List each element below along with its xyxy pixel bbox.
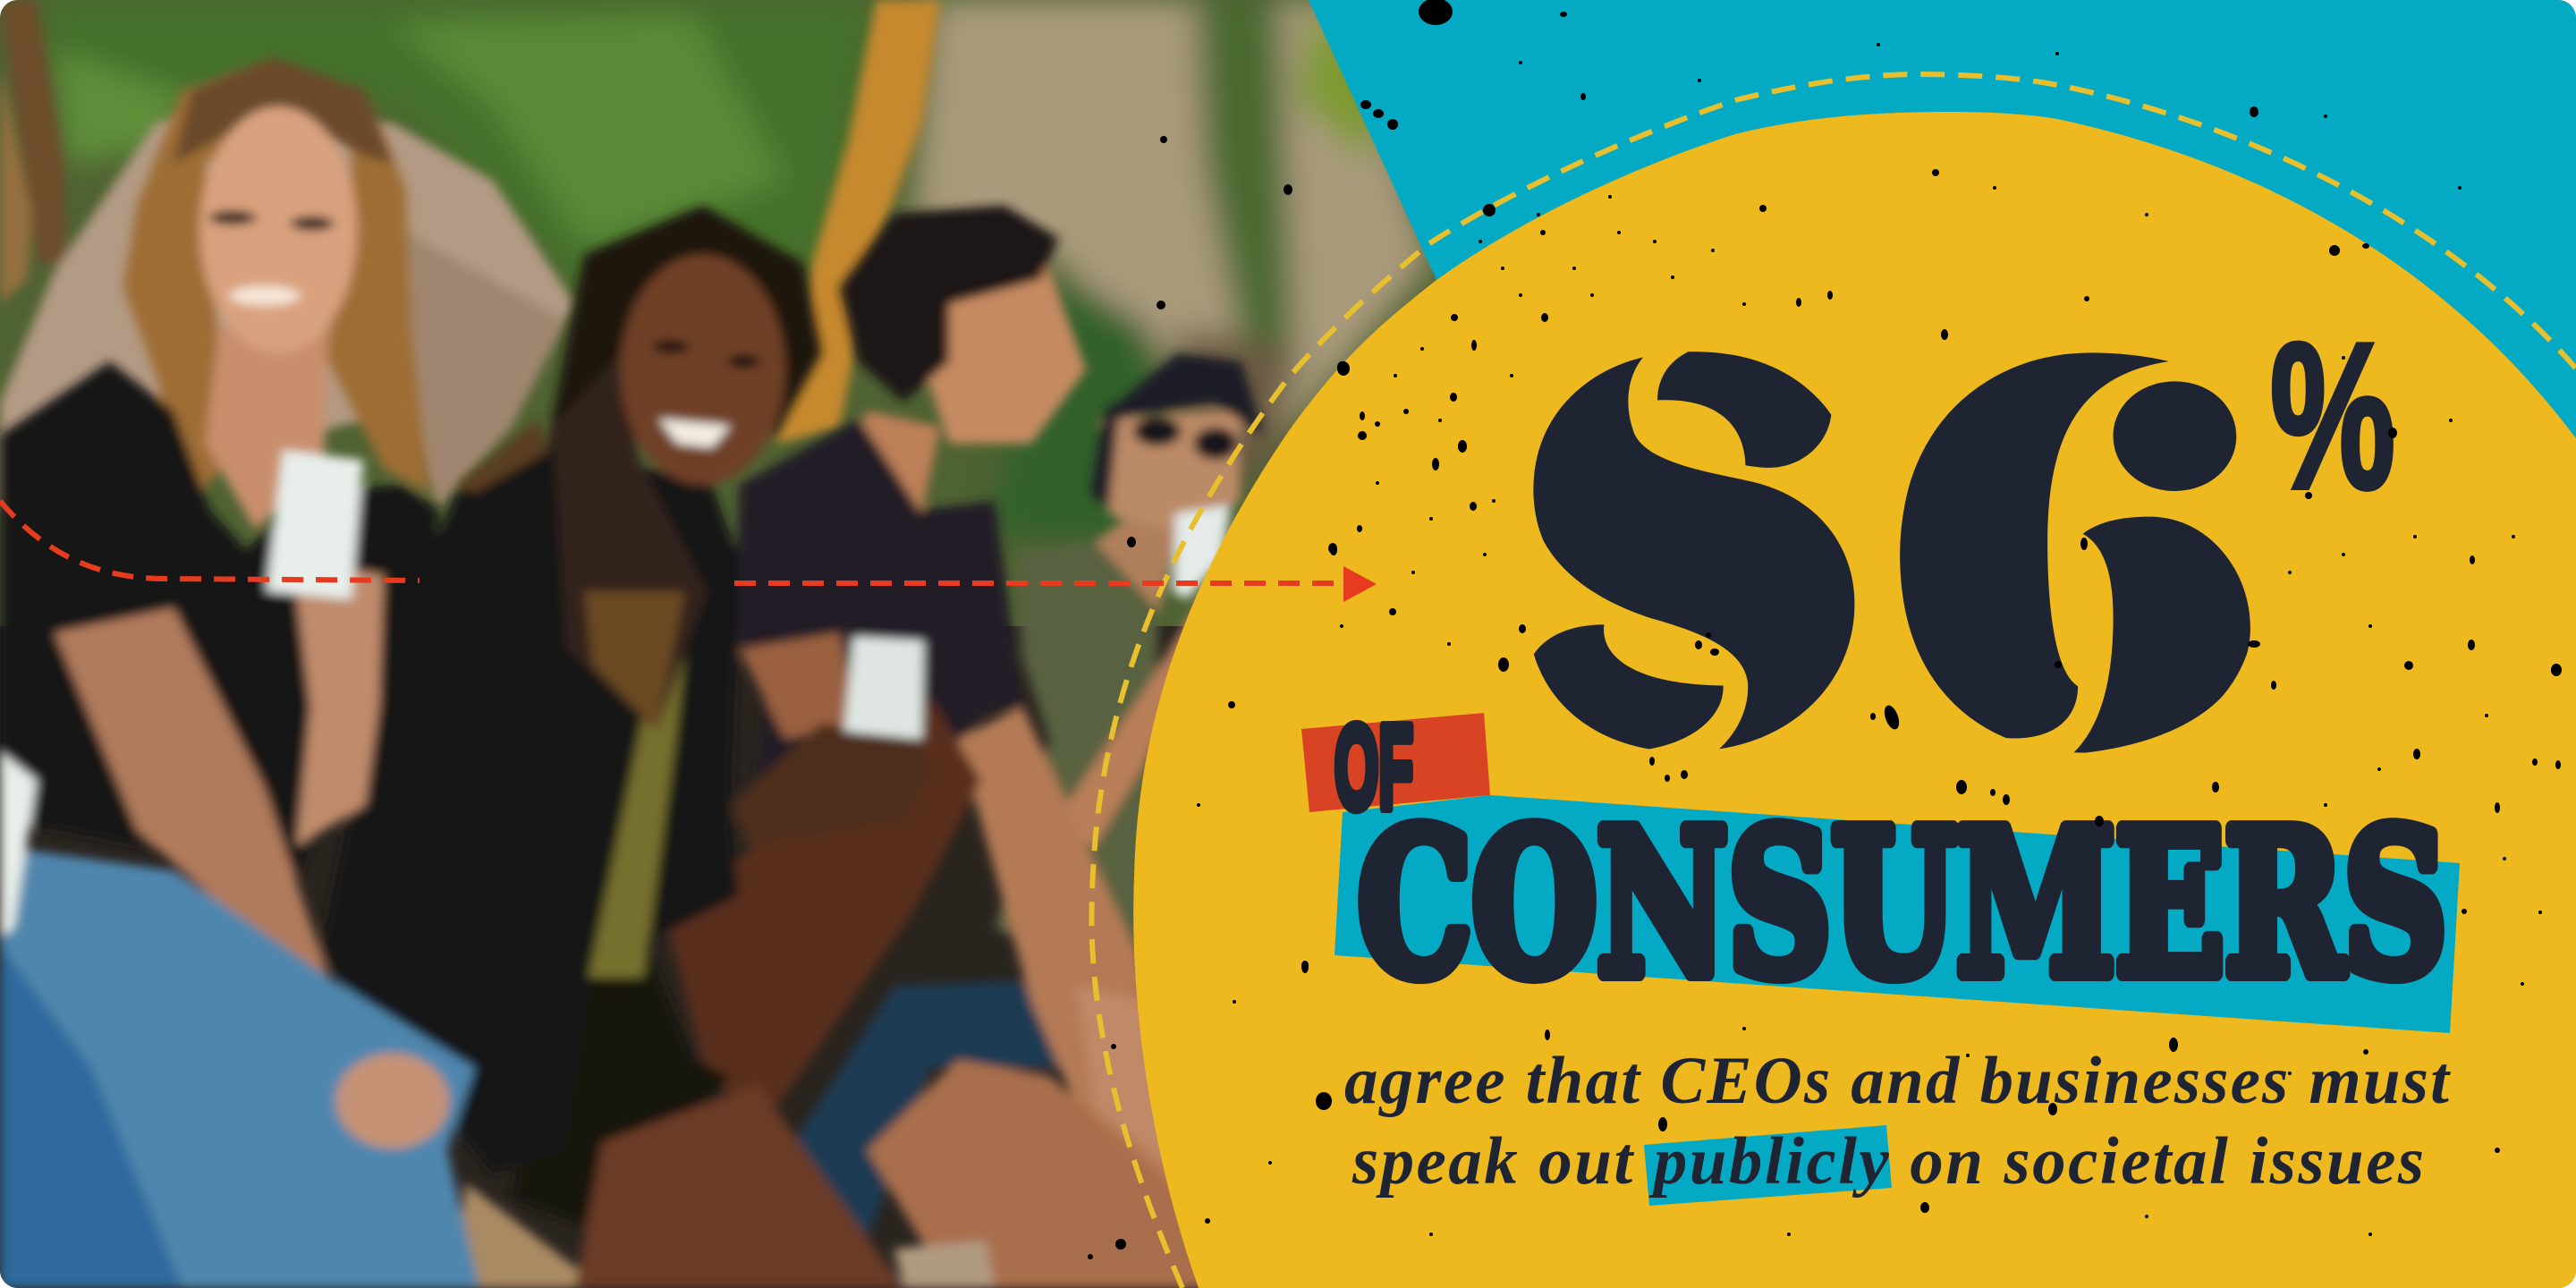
man with cap xyxy=(995,353,1264,998)
photo: people xyxy=(0,57,1264,1288)
subtitle text: speak out publicly on societal issues xyxy=(1352,1124,2424,1199)
red label behind OF xyxy=(1301,713,1490,812)
text: OF xyxy=(1335,701,1413,833)
photo: tree trunks xyxy=(0,0,940,509)
subtitle text xyxy=(1344,1044,2451,1199)
red dashed arrow, right part with head xyxy=(734,566,1377,602)
woman in black shirt xyxy=(0,57,479,1288)
woman with dreadlocks xyxy=(319,206,981,1288)
percent sign: % xyxy=(2270,301,2395,532)
dashed yellow circle arc xyxy=(1091,74,2576,1288)
red dashed arrow, left part xyxy=(0,501,419,580)
big number: 86 xyxy=(1494,319,2269,762)
yellow circle panel xyxy=(1133,112,2576,1288)
teal background panel xyxy=(1309,0,2576,465)
highlight behind publicly xyxy=(1644,1125,1892,1206)
teal band behind CONSUMERS xyxy=(1335,795,2460,1033)
man in dark t-shirt xyxy=(734,206,1223,1288)
rock under the people xyxy=(456,1182,602,1288)
subtitle text: agree that CEOs and businesses must xyxy=(1344,1044,2451,1118)
big number: 86: 6 xyxy=(1970,341,2184,757)
big number: 86: 8 xyxy=(1593,341,1794,757)
ink splatter xyxy=(1088,0,2562,1259)
photo background: hillside and rocks xyxy=(37,0,1431,542)
